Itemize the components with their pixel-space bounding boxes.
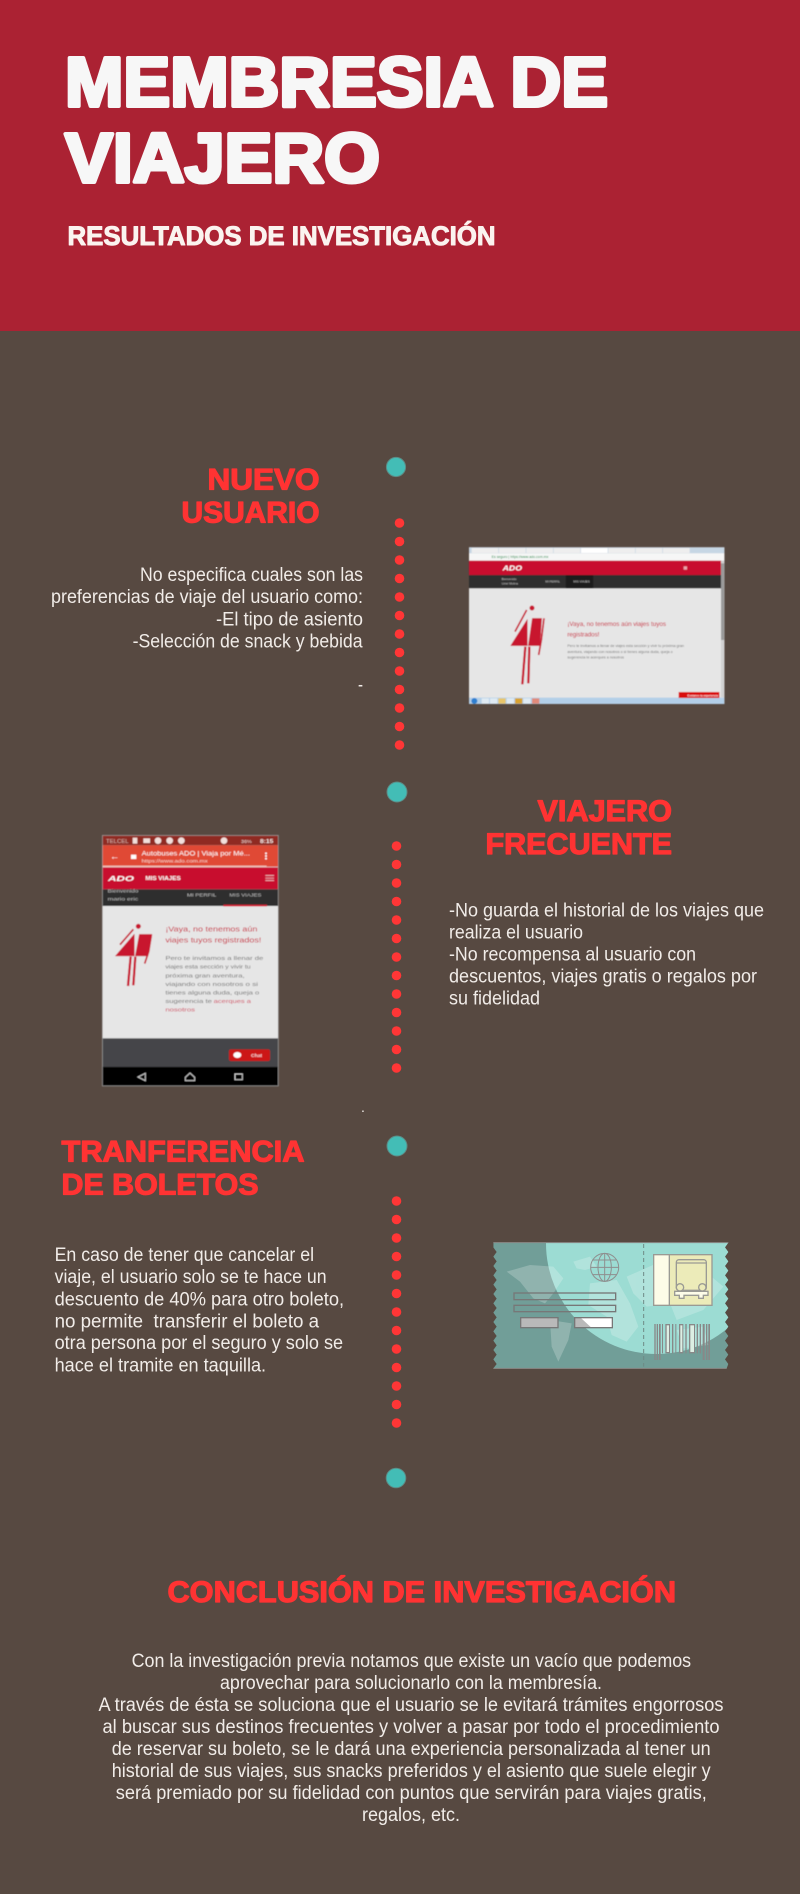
text: nuevo usuario <box>51 565 363 696</box>
phone screenshot <box>102 835 279 1086</box>
text: viajero frecuente: su fidelidad <box>449 988 540 1010</box>
phone screenshot: MIS VIAJES <box>229 892 262 898</box>
heading: viajero frecuente: FRECUENTE <box>486 828 672 861</box>
desktop screenshot: Pero te invitamos a llenar de viajes esta sección y vivir tu próxima gran <box>567 644 684 648</box>
desktop screenshot: MI PERFIL <box>545 579 560 583</box>
text: viajero frecuente <box>449 900 764 1010</box>
text: conclusion: de reservar su boleto, se le dará una experiencia personalizada al tener un <box>112 1739 711 1760</box>
heading: transferencia de boletos: TRANFERENCIA <box>62 1136 304 1168</box>
text: conclusion: al buscar sus destinos frecuentes y volver a pasar por todo el procedimiento <box>102 1717 720 1738</box>
text: viajero frecuente: -No recompensa al usuario con <box>449 944 696 965</box>
subtitle: RESULTADOS DE INVESTIGACIÓN <box>68 221 496 251</box>
phone screenshot: ADO <box>106 874 134 883</box>
text: viajero frecuente: -No guarda el historial de los viajes que <box>449 900 764 921</box>
phone screenshot: TELCEL <box>106 839 129 845</box>
text: transferencia de boletos: viaje, el usuario solo se te hace un <box>55 1267 327 1288</box>
phone screenshot: MI PERFIL <box>187 892 217 898</box>
heading: transferencia de boletos: DE BOLETOS <box>62 1168 258 1202</box>
text: viajero frecuente: descuentos, viajes gratis o regalos por <box>449 966 758 987</box>
dotted line 2 <box>392 841 401 1073</box>
title: MEMBRESIA DE <box>65 43 608 121</box>
timeline node 4 <box>386 1468 406 1488</box>
phone screenshot: viajando con nosotros o si <box>165 982 258 988</box>
text: conclusion: historial de sus viajes, sus snacks preferidos y el asiento que suele elegir y <box>112 1761 711 1782</box>
text: transferencia de boletos: hace el tramite en taquilla. <box>55 1356 266 1377</box>
phone screenshot: MIS VIAJES <box>145 876 181 882</box>
phone screenshot: mario eric <box>108 896 139 902</box>
timeline node 1 <box>386 457 406 477</box>
phone screenshot: tienes alguna duda, queja o <box>165 990 259 996</box>
desktop screenshot: ADO <box>501 563 522 572</box>
heading: viajero frecuente: VIAJERO <box>538 795 672 828</box>
dotted line 1 <box>395 518 404 750</box>
desktop screenshot: aventura, viajando con nosotros o si tienes alguna duda, queja o <box>567 650 673 654</box>
barcode <box>654 1324 710 1360</box>
dotted line 3 <box>392 1196 401 1428</box>
mascot figure <box>511 606 544 684</box>
bus voucher <box>654 1255 712 1305</box>
text: transferencia de boletos: descuento de 40% para otro boleto, <box>55 1290 344 1310</box>
desktop screenshot: MIS VIAJES <box>573 579 590 583</box>
dashed divider <box>642 1244 645 1367</box>
phone screenshot: sugerencia te <box>165 999 212 1005</box>
phone screenshot: Chat <box>251 1053 262 1059</box>
text: conclusion: aprovechar para solucionarlo con la membresía. <box>220 1673 602 1694</box>
heading: nuevo usuario: NUEVO <box>208 464 320 496</box>
title <box>65 43 608 197</box>
text: nuevo usuario: preferencias de viaje del usuario como: <box>51 587 363 608</box>
phone screenshot: acerques a <box>214 999 252 1005</box>
phone screenshot: próxima gran aventura, <box>165 973 245 979</box>
phone screenshot: https://www.ado.com.mx <box>142 858 209 863</box>
text: conclusion: A través de ésta se soluciona que el usuario se le evitará trámites engorrosos <box>98 1695 724 1716</box>
text: nuevo usuario: No especifica cuales son las <box>140 565 363 586</box>
text: conclusion <box>98 1651 724 1826</box>
text: nuevo usuario: - <box>358 675 363 696</box>
phone screenshot: ← <box>110 851 119 861</box>
text: conclusion: regalos, etc. <box>362 1805 460 1826</box>
desktop screenshot: sugerencia te acerques a nosotros <box>567 656 624 660</box>
desktop screenshot: Contanos tu experiencia <box>687 693 718 697</box>
text: nuevo usuario: -Selección de snack y bebida <box>133 632 363 652</box>
text: viajero frecuente: realiza el usuario <box>449 922 583 944</box>
heading: conclusion: CONCLUSIÓN DE INVESTIGACIÓN <box>168 1575 676 1609</box>
desktop screenshot <box>469 547 724 704</box>
text: conclusion: será premiado por su fidelidad con puntos que servirán para viajes gratis, <box>116 1783 707 1804</box>
text: conclusion: Con la investigación previa notamos que existe un vacío que podemos <box>132 1651 691 1672</box>
form fields <box>514 1293 616 1328</box>
icon: bus ticket <box>493 1242 728 1369</box>
globe <box>591 1253 619 1281</box>
phone screenshot: ¡Vaya, no tenemos aún <box>165 926 257 933</box>
text: transferencia de boletos: En caso de tener que cancelar el <box>55 1245 314 1266</box>
text: transferencia de boletos: no permite transferir el boleto a <box>55 1311 320 1332</box>
phone screenshot: viajes esta sección y vivir tu <box>165 965 251 971</box>
phone screenshot: Autobuses ADO | Viaja por Mé... <box>142 850 250 857</box>
text: transferencia de boletos <box>55 1245 344 1377</box>
text: nuevo usuario: -El tipo de asiento <box>216 610 363 630</box>
world map <box>507 1257 723 1362</box>
stray dot: . <box>361 1099 365 1115</box>
heading: transferencia de boletos <box>62 1136 304 1202</box>
phone screenshot: nosotros <box>165 1008 195 1014</box>
phone screenshot: Pero te invitamos a llenar de <box>165 956 263 962</box>
phone screenshot: 36% <box>241 839 252 845</box>
timeline node 2 <box>387 782 407 802</box>
mascot figure <box>115 924 152 986</box>
heading: nuevo usuario <box>182 464 320 530</box>
phone screenshot: 8:15 <box>260 839 273 845</box>
desktop screenshot: Es seguro | https://www.ado.com.mx <box>492 555 549 559</box>
phone screenshot: Bienvenido <box>108 889 139 895</box>
timeline node 3 <box>387 1136 407 1156</box>
text: transferencia de boletos: otra persona por el seguro y solo se <box>55 1333 343 1354</box>
phone screenshot: viajes tuyos registrados! <box>165 938 261 945</box>
desktop screenshot: registrados! <box>567 631 600 638</box>
heading: viajero frecuente <box>486 795 672 861</box>
title: VIAJERO <box>65 119 380 197</box>
desktop screenshot: Bienvenido <box>502 577 517 581</box>
desktop screenshot: ¡Vaya, no tenemos aún viajes tuyos <box>567 621 666 628</box>
desktop screenshot: Uziel Molina <box>502 581 518 585</box>
header banner <box>0 0 800 331</box>
heading: nuevo usuario: USUARIO <box>182 496 320 530</box>
